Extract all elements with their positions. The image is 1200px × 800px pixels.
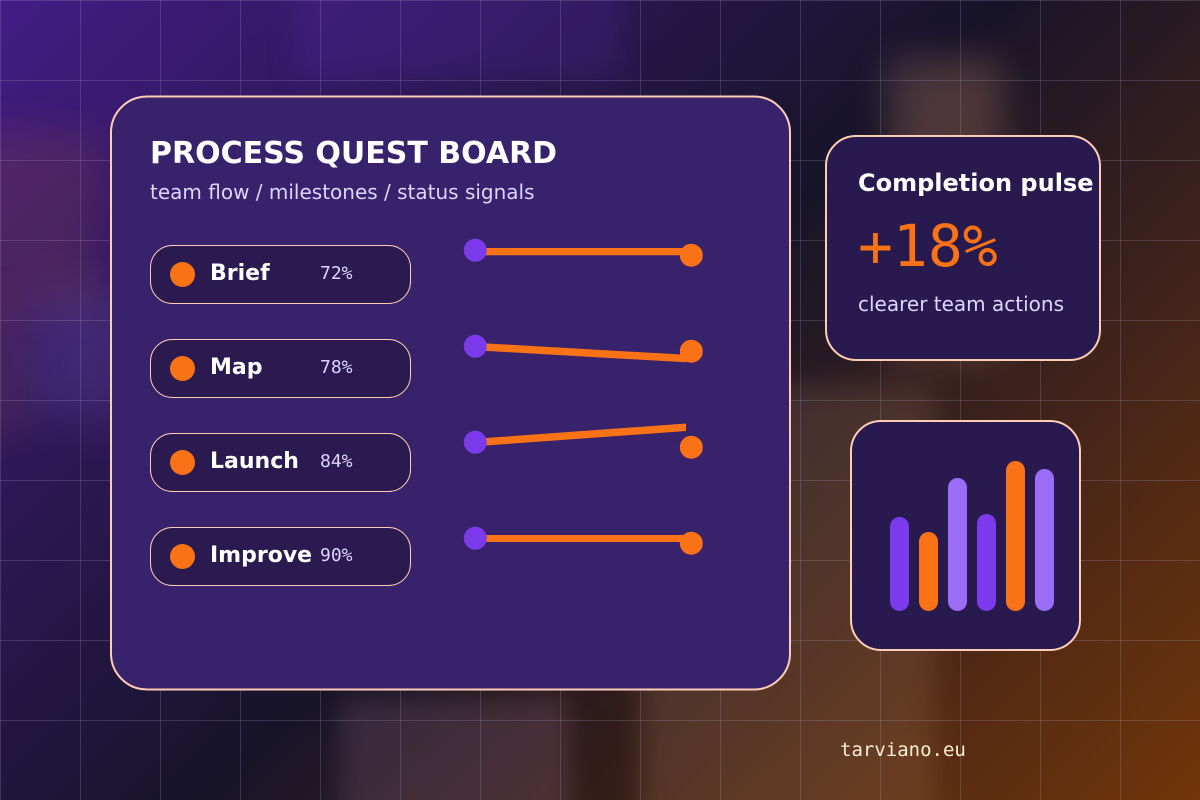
panel: completion pulse [826, 136, 1100, 360]
panel: process quest board [111, 96, 790, 690]
connector: Launch [464, 424, 703, 459]
row: Improve: Improve [210, 543, 312, 568]
row: Improve [150, 528, 410, 586]
subtitle: team flow / milestones / status signals [150, 180, 535, 204]
row: Brief: Brief [210, 261, 270, 286]
heading: PROCESS QUEST BOARD [150, 136, 557, 171]
row: Map: 78% [320, 357, 353, 378]
row: Brief [150, 246, 410, 304]
connector: Brief [464, 239, 703, 267]
row: Launch [150, 434, 410, 492]
row: Map [150, 340, 410, 398]
connector: Map [464, 335, 703, 363]
metric: +18% [858, 212, 998, 280]
row: Improve: 90% [320, 545, 353, 566]
connector: Improve [464, 527, 703, 555]
card heading: Completion pulse [858, 169, 1093, 197]
row: Launch: 84% [320, 451, 353, 472]
panel: bar chart [851, 421, 1080, 650]
footer url: tarviano.eu [840, 739, 966, 761]
caption: clearer team actions [858, 292, 1064, 316]
row: Map: Map [210, 355, 262, 380]
row: Launch: Launch [210, 449, 299, 474]
row: Brief: 72% [320, 263, 353, 284]
